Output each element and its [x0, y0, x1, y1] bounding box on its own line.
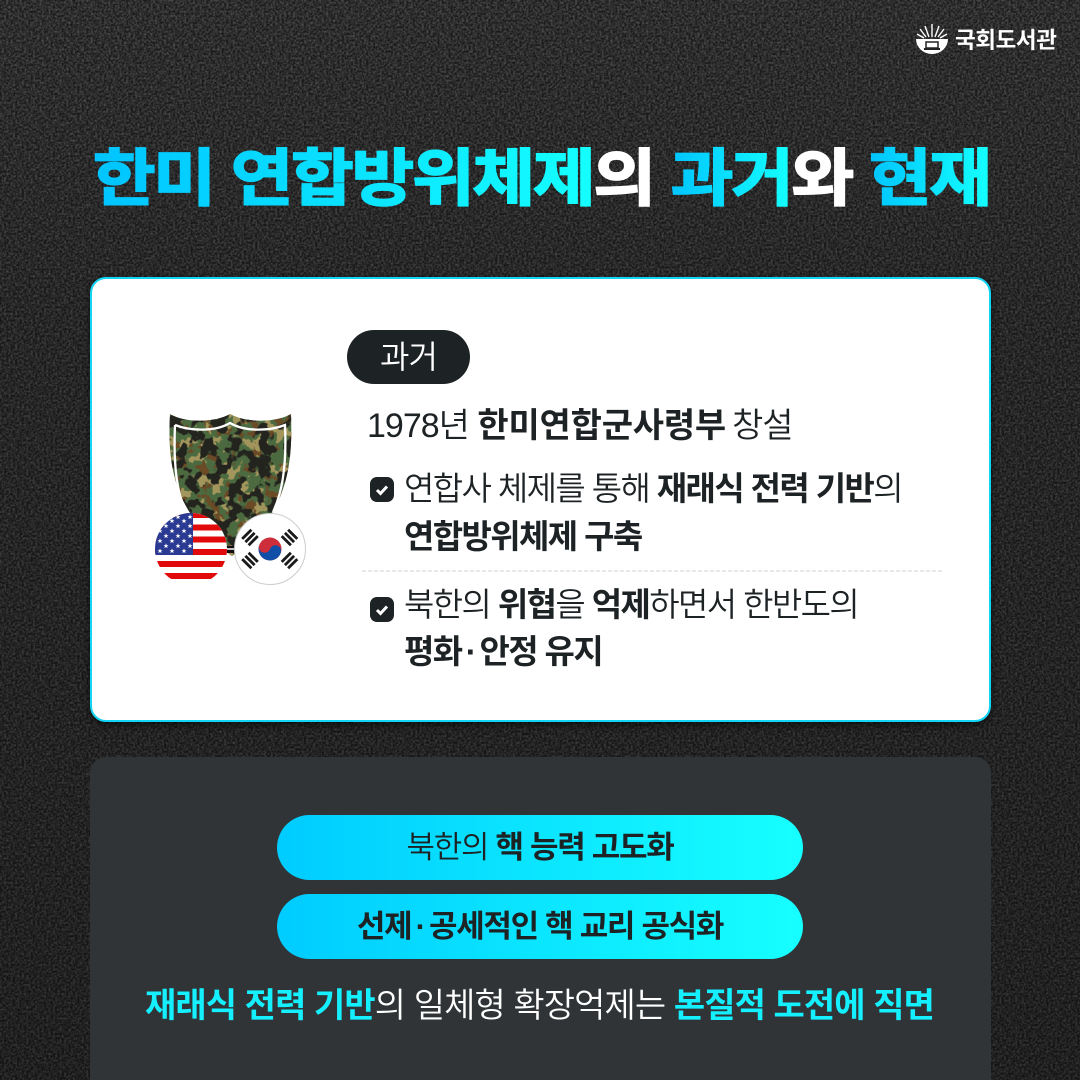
pill: preemptive doctrine: 선제 · 공세적인 핵 교리 공식화 — [357, 909, 723, 944]
pill: nuclear capability — [277, 815, 803, 880]
title: 한미 연합방위체제의 과거와 현재 — [93, 144, 990, 214]
panel: past — [90, 277, 991, 722]
conclusion text: 재래식 전력 기반의 일체형 확장억제는 본질적 도전에 직면 — [145, 987, 934, 1025]
text: line one: 연합사 체제를 통해 재래식 전력 기반의 — [404, 470, 902, 507]
text: line one: 북한의 위협을 억제하면서 한반도의 — [404, 586, 858, 623]
Korean flag — [234, 514, 306, 584]
badge: past — [347, 330, 470, 384]
US flag — [155, 512, 227, 585]
text: line two: 연합방위체제 구축 — [404, 518, 642, 555]
list item: deterrence — [370, 586, 858, 670]
pill: nuclear capability: 북한의 핵 능력 고도화 — [407, 830, 673, 865]
icon: camouflage shield with US and Korean flags — [155, 414, 306, 585]
icon: library sunburst emblem — [916, 24, 948, 54]
text: line two: 평화 · 안정 유지 — [404, 633, 602, 670]
pill: preemptive doctrine — [277, 894, 803, 959]
icon: check — [370, 597, 394, 622]
icon: check — [370, 477, 394, 502]
panel: present — [90, 757, 991, 1080]
list item: combined defense posture — [370, 470, 902, 555]
badge: past: 과거 — [380, 339, 437, 375]
heading: 1978 founding: 1978년 한미연합군사령부 창설 — [367, 407, 793, 445]
logo: National Assembly Library — [916, 24, 1057, 54]
logo wordmark: 국회도서관 — [955, 28, 1057, 53]
